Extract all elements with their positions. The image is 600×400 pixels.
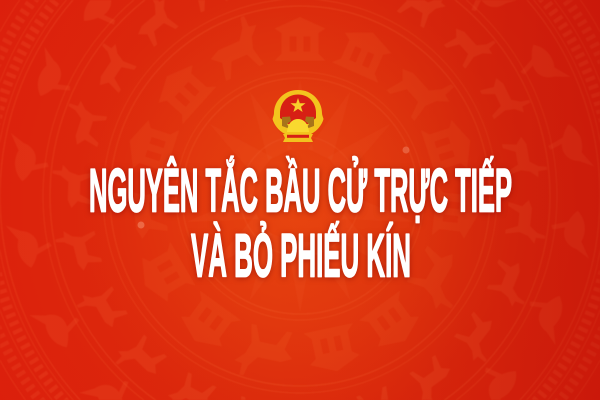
emblem rising sun and cog — [287, 119, 309, 132]
emblem red disc — [280, 94, 316, 124]
icon: national emblem of Vietnam — [272, 90, 324, 142]
emblem outer gold wreath — [272, 90, 324, 134]
emblem ribbon — [283, 134, 313, 142]
light flare left — [138, 222, 144, 228]
emblem star — [290, 98, 306, 112]
light flare right — [402, 146, 410, 154]
title — [89, 156, 512, 290]
emblem rice sheaves — [282, 116, 314, 129]
